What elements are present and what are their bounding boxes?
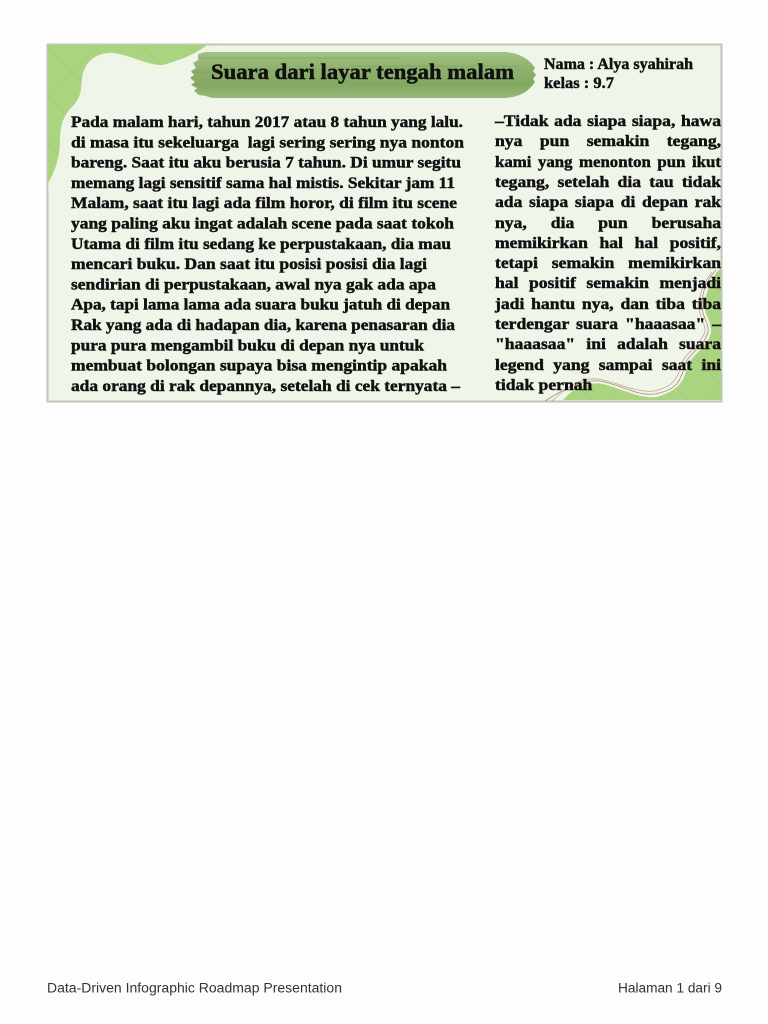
decoration: bottom-right green blob bbox=[545, 268, 721, 401]
decoration: top-left green blob bbox=[48, 45, 217, 187]
text block: left story column: Pada malam hari, tahun 2017 atau 8 tahun yang lalu. bbox=[71, 114, 463, 131]
footer: presentation title: Data-Driven Infographic Roadmap Presentation bbox=[47, 980, 342, 996]
text block: right story column: tegang, setelah dia tau tidak bbox=[495, 174, 721, 191]
text block: right story column: terdengar suara "haaasaa" – bbox=[495, 316, 721, 333]
text block: right story column: nya pun semakin tegang, bbox=[495, 133, 721, 150]
author name and class: kelas : 9.7 bbox=[544, 75, 614, 92]
text block: right story column: ada siapa siapa di depan rak bbox=[495, 194, 721, 211]
text block: left story column: bareng. Saat itu aku berusia 7 tahun. Di umur segitu bbox=[71, 155, 461, 172]
text block: right story column bbox=[494, 113, 722, 394]
text block: left story column: Malam, saat itu lagi ada film horor, di film itu scene bbox=[71, 195, 457, 212]
text block: left story column: pura pura mengambil buku di depan nya untuk bbox=[71, 337, 424, 354]
footer: page number: Halaman 1 dari 9 bbox=[618, 980, 722, 996]
text block: right story column: kami yang menonton pun ikut bbox=[495, 154, 721, 171]
text block: right story column: tetapi semakin memikirkan bbox=[495, 255, 721, 272]
text block: left story column: Utama di film itu sedang ke perpustakaan, dia mau bbox=[71, 236, 451, 253]
text block: left story column: memang lagi sensitif sama hal mistis. Sekitar jam 11 bbox=[71, 175, 455, 192]
text block: right story column: legend yang sampai saat ini bbox=[495, 357, 721, 374]
title banner: brush stroke bbox=[190, 52, 536, 98]
text block: right story column: hal positif semakin menjadi bbox=[495, 275, 721, 292]
text block: left story column bbox=[71, 114, 464, 395]
author name and class bbox=[544, 56, 693, 92]
text block: left story column: sendirian di perpustakaan, awal nya gak ada apa bbox=[71, 276, 436, 293]
text block: left story column: mencari buku. Dan saat itu posisi posisi dia lagi bbox=[71, 256, 428, 273]
text block: left story column: di masa itu sekeluarga lagi sering sering nya nonton bbox=[71, 134, 464, 151]
text block: left story column: Rak yang ada di hadapan dia, karena penasaran dia bbox=[71, 317, 455, 334]
text block: right story column: "haaasaa" ini adalah suara bbox=[495, 336, 721, 353]
text block: left story column: membuat bolongan supaya bisa mengintip apakah bbox=[71, 358, 447, 375]
text block: left story column: ada orang di rak depannya, setelah di cek ternyata – bbox=[71, 378, 461, 395]
text block: right story column: tidak pernah bbox=[495, 377, 592, 394]
text block: right story column: memikirkan hal hal positif, bbox=[495, 235, 721, 252]
text block: left story column: yang paling aku ingat adalah scene pada saat tokoh bbox=[71, 216, 454, 232]
text block: left story column: Apa, tapi lama lama ada suara buku jatuh di depan bbox=[71, 297, 450, 314]
text block: right story column: nya, dia pun berusaha bbox=[495, 214, 721, 232]
title: Suara dari layar tengah malam bbox=[211, 59, 514, 84]
text block: right story column: –Tidak ada siapa siapa, hawa bbox=[495, 113, 721, 130]
author name and class: Nama : Alya syahirah bbox=[544, 56, 693, 73]
text block: right story column: jadi hantu nya, dan tiba tiba bbox=[495, 296, 721, 313]
